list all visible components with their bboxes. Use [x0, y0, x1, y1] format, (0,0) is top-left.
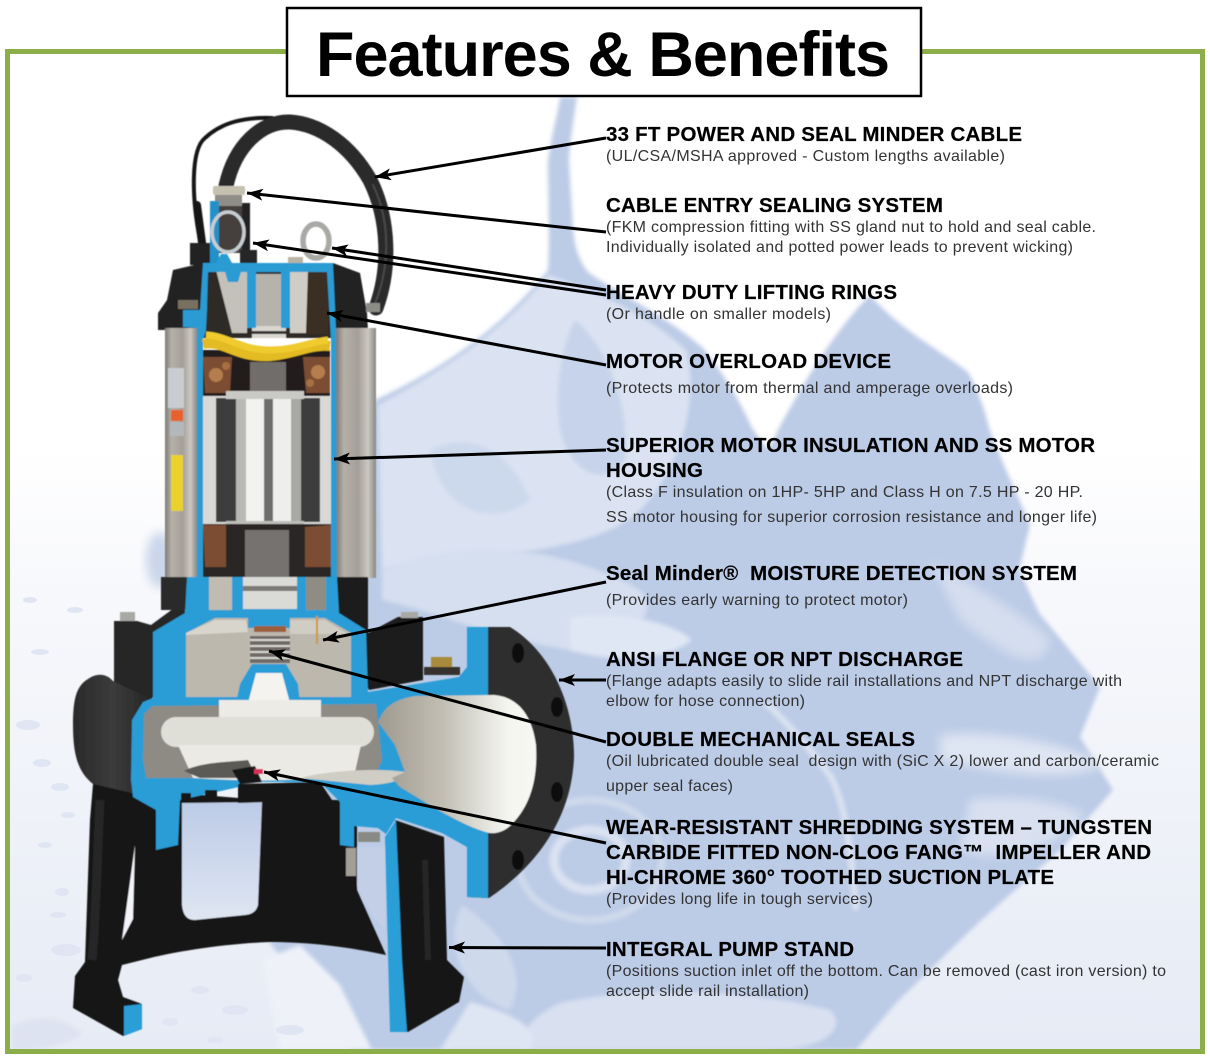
feature: motor insulation: (Class F insulation on 1HP- 5HP and Class H on 7.5 HP - 20 HP.: [606, 484, 1083, 501]
feature: motor overload: (Protects motor from thermal and amperage overloads): [606, 380, 1013, 397]
volute black shell: [73, 675, 153, 795]
feature: pump stand: (Positions suction inlet off the bottom. Can be removed (cast iron version) to: [606, 963, 1166, 980]
feature: discharge: (Flange adapts easily to slide rail installations and NPT discharge with: [606, 673, 1122, 690]
bolts: [120, 612, 418, 876]
arrow: shredding system: [264, 772, 606, 843]
icon: power cable: [194, 118, 386, 308]
lower motor windings: [203, 524, 331, 578]
pump cutaway illustration: [73, 118, 574, 1036]
arrow: motor housing: [334, 450, 606, 459]
feature: power cable: (UL/CSA/MSHA approved - Custom lengths available): [606, 148, 1005, 165]
feature: discharge: [606, 648, 1122, 710]
icon: cable entry fitting: [210, 186, 250, 263]
arrow: moisture detection: [323, 582, 606, 640]
arrow: flange: [559, 678, 606, 682]
feature: discharge: elbow for hose connection): [606, 693, 805, 710]
feature: mechanical seals: DOUBLE MECHANICAL SEALS: [606, 728, 915, 751]
feature: lifting rings: [606, 281, 897, 323]
arrow: mechanical seals: [269, 651, 606, 742]
feature: motor insulation: HOUSING: [606, 459, 703, 482]
callout arrows: [247, 138, 606, 948]
feature: mechanical seals: (Oil lubricated double seal design with (SiC X 2) lower and carbon/ceramic: [606, 753, 1159, 770]
seal housing black blocks: [114, 600, 185, 700]
feature: power cable: [606, 123, 1022, 165]
feature: cable entry: (FKM compression fitting with SS gland nut to hold and seal cable.: [606, 219, 1096, 236]
feature: shredding system: CARBIDE FITTED NON-CLOG FANG™ IMPELLER AND: [606, 841, 1151, 864]
arrow: lifting ring right: [332, 248, 606, 290]
feature: mechanical seals: [606, 728, 1159, 795]
discharge flange: [467, 627, 574, 898]
blue housing walls: [183, 263, 337, 578]
feature: shredding system: (Provides long life in tough services): [606, 891, 873, 908]
feature: lifting rings: HEAVY DUTY LIFTING RINGS: [606, 281, 897, 304]
feature: shredding system: [606, 816, 1152, 908]
feature: lifting rings: (Or handle on smaller models): [606, 306, 831, 323]
feature: motor insulation: [606, 434, 1097, 526]
feature: shredding system: WEAR-RESISTANT SHREDDING SYSTEM – TUNGSTEN: [606, 816, 1152, 839]
feature: cable entry: CABLE ENTRY SEALING SYSTEM: [606, 194, 943, 217]
feature: cable entry: [606, 194, 1096, 256]
feature: motor insulation: SS motor housing for superior corrosion resistance and longer life): [606, 509, 1097, 526]
casing bottom ribs: [181, 782, 332, 803]
seal chamber interior: [186, 577, 368, 703]
stainless motor housing: [165, 328, 197, 578]
feature: motor overload: [606, 350, 1013, 397]
feature: motor insulation: SUPERIOR MOTOR INSULATION AND SS MOTOR: [606, 434, 1095, 457]
feature: moisture detection: (Provides early warning to protect motor): [606, 592, 908, 609]
feature: pump stand: accept slide rail installation): [606, 983, 809, 1000]
motor interior: top chamber: [183, 254, 337, 578]
motor windings and yellow leads: [203, 335, 330, 396]
feature: power cable: 33 FT POWER AND SEAL MINDER CABLE: [606, 123, 1022, 146]
feature: moisture detection: [606, 562, 1077, 609]
feature: shredding system: HI-CHROME 360° TOOTHED SUCTION PLATE: [606, 866, 1054, 889]
feature: pump stand: INTEGRAL PUMP STAND: [606, 938, 854, 961]
feature: cable entry: Individually isolated and potted power leads to prevent wicking): [606, 239, 1073, 256]
stand: [73, 784, 464, 1036]
motor stator and rotor: [203, 391, 331, 529]
blue cast casing: [131, 577, 488, 898]
arrow: lifting ring left: [253, 243, 606, 295]
feature: discharge: ANSI FLANGE OR NPT DISCHARGE: [606, 648, 963, 671]
discharge passage: [378, 695, 536, 833]
volute chamber and impeller: [143, 700, 405, 785]
feature: motor overload: MOTOR OVERLOAD DEVICE: [606, 350, 891, 373]
arrow: pump stand: [449, 946, 606, 950]
feature: pump stand: [606, 938, 1166, 1000]
water droplets: [16, 597, 304, 1043]
arrow: cable: [375, 138, 606, 177]
arrow: cable entry: [247, 193, 606, 232]
motor top cap: [158, 263, 368, 330]
title box: Features & Benefits: [316, 20, 890, 90]
feature: moisture detection: Seal Minder® MOISTURE DETECTION SYSTEM: [606, 562, 1077, 585]
housing labels: [168, 368, 184, 511]
icon: lifting rings: [190, 212, 329, 265]
brass plug: [424, 657, 460, 675]
arrow: motor overload: [327, 313, 606, 365]
feature: mechanical seals: upper seal faces): [606, 778, 733, 795]
